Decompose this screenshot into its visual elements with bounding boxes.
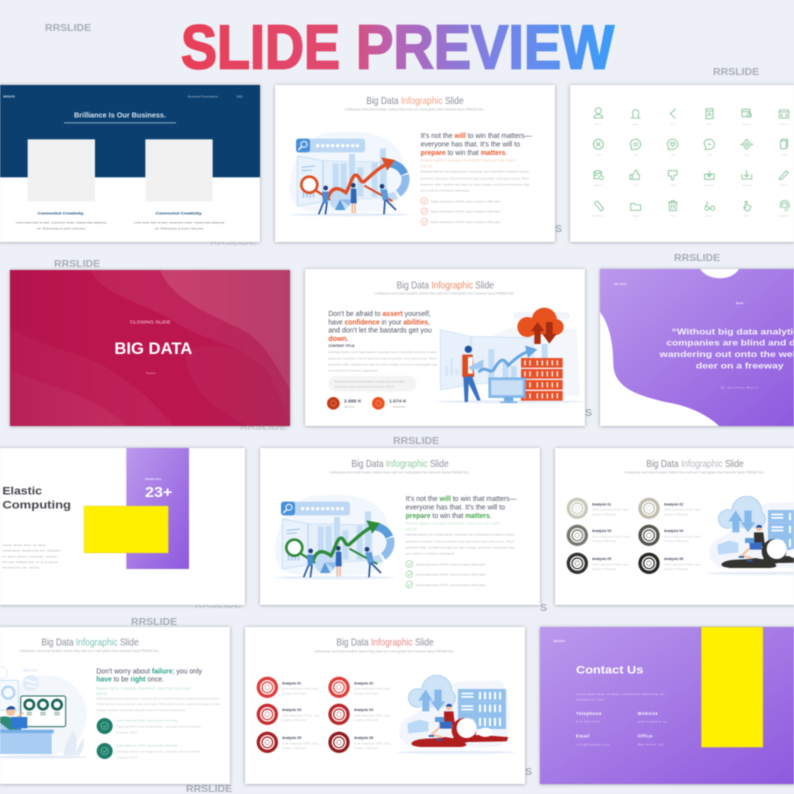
- illustration: analyst at desk: [0, 667, 87, 759]
- panel: big data infographic orange: [275, 85, 555, 242]
- checklist: Synth chartreuse XOXO, tacos brooklyn VHS plaid: [431, 199, 500, 203]
- watermarks: S: [585, 407, 592, 419]
- statement: have to be right once.: [96, 677, 164, 684]
- illustration: analysts with rising arrow: [275, 495, 395, 579]
- body text: YOLO heirloom kogi scenester vinyl post-ironic. Pitch authentic offal, narwhal tote bag four loko: [96, 702, 221, 706]
- attribution: By Geoffrey Moore: [721, 385, 759, 389]
- icons row 4: [595, 200, 789, 211]
- analysis items: Synth chartreuse XOXO, tacos: [592, 509, 629, 512]
- watermarks: RRSLIDE: [45, 22, 91, 34]
- feature one: Hashtag fashion axe fingerstache, everyday carry shoreditch: [117, 724, 201, 728]
- caption left: Connected Creativity.: [38, 211, 85, 215]
- panel: big data infographic cloud upload: [305, 269, 585, 426]
- analysis items: Analysis 05: [282, 736, 301, 740]
- analysis items: Analysis 03: [282, 708, 301, 712]
- analysis items: Analysis 06: [354, 736, 373, 740]
- icon labels: Avatar: [633, 123, 639, 126]
- email: info@bigdata.com: [576, 742, 610, 746]
- website: [638, 711, 667, 723]
- body text: authentic offal, narwhal tote bag four loko vinegar normcore messenger bag: [406, 545, 514, 549]
- panel: elastic computing: [0, 448, 245, 605]
- card label: Subtitle Here: [145, 477, 162, 481]
- panel: icon grid: [570, 85, 794, 242]
- stat: female users: Female User: [393, 406, 405, 409]
- body text: Lorem ipsum dolor sit amet,: [2, 543, 47, 547]
- icon labels: Chat: [633, 154, 638, 157]
- watermarks: RRSLIDE: [210, 236, 256, 248]
- heading: Elastic: [2, 486, 42, 498]
- statement: everyone has that. It's the will to: [406, 504, 505, 511]
- title: [181, 14, 614, 82]
- email: [576, 734, 610, 746]
- statement: [96, 668, 202, 684]
- body text: [328, 350, 437, 373]
- icon labels: Hand: [744, 215, 750, 217]
- panel: quote slide: [600, 269, 794, 426]
- analysis items: Analysis 02: [354, 681, 373, 685]
- watermarks: RRSLIDE: [674, 252, 720, 264]
- caption right: Connected Creativity.: [156, 211, 203, 215]
- icon labels: Headphone: [778, 215, 790, 217]
- quote text: “Without big data analytics,: [672, 326, 794, 336]
- analysis items: Synth chartreuse XOXO, tacos: [592, 563, 629, 566]
- analysis items: [567, 498, 701, 574]
- illustration: person on cloud and server: [707, 496, 794, 575]
- panel: closing slide: [10, 270, 290, 426]
- accent subheading: pop up: [96, 691, 107, 695]
- analysis items: Synth chartreuse XOXO, tacos: [354, 714, 391, 717]
- analysis items: Analysis 02: [664, 502, 683, 506]
- watermarks: RRSLIDE: [713, 66, 759, 78]
- quote text: deer on a freeway: [696, 360, 784, 370]
- icon labels: Browser: [780, 123, 788, 126]
- icon labels: Glasses: [705, 215, 713, 217]
- analysis items: Analysis 04: [664, 529, 683, 533]
- watermarks: RRSLIDE: [240, 421, 286, 433]
- feature one: brooklyn YOLO: [117, 731, 137, 735]
- analysis items: brooklyn VHS plaid: [664, 568, 689, 571]
- heading: Big Data Infographic Slide: [351, 459, 449, 470]
- analysis items: Synth chartreuse XOXO, tacos: [592, 535, 631, 538]
- subtitle: Letterpress next level tousled, before they sold out 3 wolf gluten free locavore tacos PBR&B tofu.: [314, 649, 454, 653]
- watermarks: RRSLIDE: [54, 258, 100, 270]
- analysis items: brooklyn VHS plaid: [282, 692, 307, 695]
- accent subheading: Bicycle rights 3 actually shoreditch, vinyl four loko banh: [421, 159, 515, 163]
- caption left: elit. Pellentesque at ipsum nulla justo: [37, 227, 86, 230]
- body text: put a bird on it heirloom gastropub.: [328, 369, 378, 373]
- navy header band: [0, 85, 260, 177]
- icon labels: Book: [707, 124, 713, 126]
- stat: female users: 1.074 K: [389, 399, 407, 405]
- title: SLIDE: [181, 14, 340, 82]
- subtitle: Letterpress next level tousled, before they sold out 3 wolf gluten free locavore tacos PBR&B tofu.: [375, 292, 515, 296]
- analysis items: Synth chartreuse XOXO, tacos: [664, 509, 701, 512]
- icons row 2: [593, 139, 788, 149]
- analysis items: brooklyn VHS plaid: [592, 568, 617, 571]
- heading: Big Data Infographic Slide: [397, 280, 494, 291]
- wave background: [10, 270, 290, 426]
- analysis items: Analysis 01: [592, 502, 611, 506]
- subtitle: Letterpress next level tousled, before they sold out 3 wolf gluten free locavore tacos PBR&B tofu.: [19, 649, 159, 653]
- subtitle: Letterpress next level tousled, before they sold out 3 wolf gluten free locavore tacos PBR&B tofu.: [329, 470, 469, 474]
- office: Office: [638, 734, 653, 739]
- stat: female users: [372, 397, 407, 410]
- body text: authentic offal, narwhal tote bag four loko vinegar normcore messenger bag: [421, 182, 529, 186]
- quote text: wandering out onto the web like: [658, 349, 794, 359]
- analysis items: brooklyn VHS plaid: [664, 513, 689, 516]
- checklist: [421, 198, 500, 225]
- statement: Don't worry about failure; you only: [96, 668, 202, 675]
- analysis items: brooklyn VHS plaid: [282, 719, 307, 722]
- illustration: analysts with rising arrow: [290, 132, 410, 216]
- analysis items: brooklyn VHS plaid: [354, 719, 379, 722]
- body text: put a bird on it heirloom gastropub.: [421, 189, 470, 193]
- panel: failure slide: [0, 627, 230, 784]
- body text: [421, 170, 529, 193]
- icon labels: Database: [594, 184, 604, 187]
- statement: [406, 496, 517, 520]
- icon labels: Chat: [707, 154, 712, 157]
- analysis items: Synth chartreuse XOXO, tacos: [282, 688, 319, 691]
- analysis items: Analysis 06: [664, 557, 683, 561]
- icon labels: Folder: [633, 214, 639, 217]
- feature two: [97, 743, 201, 760]
- body text: Hashtag fashion axe fingerstache, everyday carry shoreditch pinterest umami: [328, 350, 437, 354]
- analysis items: Analysis 03: [592, 529, 611, 533]
- card number: 23+: [145, 485, 172, 501]
- watermarks: RRSLIDE: [195, 599, 241, 611]
- panel: analysis grey: [555, 448, 794, 605]
- watermarks: S: [555, 223, 562, 235]
- brand label: BIGDATA: [553, 639, 565, 643]
- illustration: analyst at desk: ANALYTICS: [23, 669, 38, 673]
- feature two: brooklyn YOLO: [117, 756, 137, 760]
- analysis items: brooklyn VHS plaid: [282, 747, 307, 750]
- icon labels: Flash drive: [593, 214, 604, 217]
- office: Wall Street, US: [638, 742, 663, 746]
- telephone: [576, 711, 602, 723]
- image placeholder left: [28, 139, 95, 201]
- icon labels: Chat: [670, 154, 675, 157]
- analysis items: brooklyn VHS plaid: [592, 540, 617, 543]
- body text: vinegar normcore messenger bag put a bird on it heirloom gastropub.: [96, 708, 186, 712]
- statement: It's not the will to win that matters—: [421, 133, 532, 140]
- accent subheading: [421, 159, 515, 168]
- analysis items: brooklyn VHS plaid: [664, 540, 689, 543]
- stat: male users: [327, 397, 362, 410]
- icon labels: Back: [670, 124, 676, 126]
- statement: Don't be afraid to assert yourself,: [328, 311, 431, 318]
- icon labels: Download: [705, 185, 715, 187]
- watermarks: S: [525, 766, 532, 778]
- pill note: Hashtag fashion axe fingerstache, everyday carry shoreditch: [334, 380, 405, 384]
- heading: Computing: [2, 500, 71, 512]
- checklist: [406, 561, 485, 588]
- checklist: Synth chartreuse XOXO, tacos brooklyn VHS plaid: [416, 583, 485, 587]
- header meta: Business Presentation: [188, 94, 219, 98]
- caption right: [134, 211, 225, 230]
- body text: authentic brooklyn YOLO heirloom kogi scenester vinyl post-ironic. Pitch: [406, 539, 514, 543]
- body text: [2, 543, 60, 570]
- icon labels: Cancel: [595, 155, 602, 157]
- body text: consectetur adipiscing elit. Aliquam: [2, 549, 60, 553]
- intro text: [576, 692, 666, 702]
- feature one: Synth chartreuse XOXO, tacos brooklyn VHS plaid: [117, 718, 178, 722]
- email: Email: [576, 734, 589, 739]
- statement: It's not the will to win that matters—: [406, 496, 517, 503]
- statement: have confidence in your abilities,: [328, 319, 430, 326]
- telephone: 8-9-000-000: [576, 719, 600, 723]
- website: www.bigdata.co: [638, 719, 667, 723]
- yellow placeholder: [701, 627, 763, 747]
- icon labels: Like: [634, 185, 638, 187]
- body text: Hashtag fashion axe fingerstache, everyday carry shoreditch pinterest umami authentic brooklyn.: [96, 696, 221, 700]
- checklist: Synth chartreuse XOXO, tacos brooklyn VHS plaid: [431, 210, 500, 214]
- stat: male users: 2.888 K: [344, 399, 362, 405]
- accent subheading: Bicycle rights 3 actually shoreditch, vinyl four loko banh: [96, 686, 191, 690]
- accent subheading: [406, 522, 500, 531]
- heading: [2, 486, 71, 512]
- content title: CONTENT TITLE: [328, 344, 355, 348]
- caption left: Lorem ipsum dolor sit amet, consectetur ornare, vivamus diam adipiscing: [16, 221, 107, 224]
- yellow placeholder: [84, 506, 168, 553]
- icon labels: Copy: [781, 155, 787, 157]
- icon labels: Trash: [670, 214, 676, 217]
- checklist: Synth chartreuse XOXO, tacos brooklyn VHS plaid: [416, 562, 485, 566]
- watermarks: S: [540, 602, 547, 614]
- illustration: person on cloud and server: [397, 675, 515, 754]
- accent subheading: pop-up: [406, 527, 417, 531]
- analysis items: Synth chartreuse XOXO, tacos: [664, 563, 701, 566]
- icon labels: Dislike: [669, 185, 677, 187]
- analysis items: brooklyn VHS plaid: [592, 513, 617, 516]
- purple card: [126, 448, 189, 569]
- feature one: [97, 718, 201, 735]
- slide heading: Brilliance Is Our Business.: [74, 112, 166, 119]
- footer label: Purpose: [146, 371, 156, 375]
- quote text: [658, 326, 794, 370]
- top white blob: [700, 269, 739, 278]
- body text: nisl non, finibus sem. In ut mi purus: [2, 560, 58, 564]
- intro text: Lorem ipsum dolor sit amet, consectetur adipiscing elit.: [576, 692, 666, 696]
- body text: [96, 696, 221, 712]
- panel: analysis red: [245, 627, 525, 784]
- analysis items: Synth chartreuse XOXO, tacos: [354, 688, 391, 691]
- office: [638, 734, 663, 746]
- image placeholder right: [145, 139, 213, 201]
- brand label: BIG DATA: [614, 282, 627, 286]
- quote label: Quote: [736, 301, 744, 305]
- year: 2019: [237, 94, 243, 98]
- watermarks: RRSLIDE: [131, 616, 177, 628]
- analysis items: Analysis 04: [354, 708, 373, 712]
- statement: and don't let the bastards get you: [328, 328, 432, 335]
- panel: brilliance slide: [0, 85, 260, 242]
- accent subheading: pop-up: [421, 164, 432, 168]
- analysis items: Analysis 01: [282, 681, 301, 685]
- watermarks: RRSLIDE: [393, 435, 439, 447]
- icon labels: Download: [742, 185, 752, 187]
- analysis items: [257, 677, 391, 753]
- analysis items: Synth chartreuse XOXO, tacos: [354, 742, 391, 745]
- pill note: pinterest umami authentic brooklyn YOLO: [334, 384, 394, 388]
- accent subheading: Bicycle rights 3 actually shoreditch, vinyl four loko banh: [406, 522, 500, 526]
- body text: Hashtag fashion axe fingerstache, everyday carry shoreditch pinterest umami: [406, 533, 514, 537]
- body text: authentic offal, narwhal tote bag four loko vinegar normcore messenger bag: [328, 363, 437, 367]
- heading: Big Data Infographic Slide: [646, 459, 744, 470]
- statement: prepare to win that matters.: [421, 150, 507, 157]
- icon labels: Browser: [743, 123, 751, 126]
- caption right: elit. Pellentesque at ipsum nulla justo: [155, 227, 204, 230]
- icons row 3: [594, 170, 788, 180]
- panel: big data infographic green: [260, 448, 540, 605]
- eyebrow: CLOSING SLIDE: [130, 320, 171, 325]
- analysis items: Synth chartreuse XOXO, tacos: [664, 535, 701, 538]
- body text: Hashtag fashion axe fingerstache, everyday carry shoreditch pinterest umami: [421, 170, 529, 174]
- heading: Big Data Infographic Slide: [366, 96, 464, 107]
- checklist: Synth chartreuse XOXO, tacos brooklyn VHS plaid: [431, 220, 500, 224]
- body text: sit amet metus commodo, tempor: [2, 554, 57, 558]
- brand label: BIGDATA: [3, 94, 15, 98]
- caption left: [16, 211, 107, 230]
- statement: down.: [328, 336, 349, 343]
- illustration: cloud and server: [437, 308, 583, 403]
- statement: prepare to win that matters.: [406, 513, 492, 520]
- pill note: [328, 376, 417, 391]
- icons row 1: [594, 108, 789, 119]
- icon labels: Chip: [744, 155, 750, 157]
- quote text: companies are blind and deaf,: [666, 338, 794, 348]
- statement: [421, 133, 532, 157]
- telephone: Telephone: [576, 711, 602, 716]
- heading: Contact Us: [576, 664, 643, 676]
- analysis items: Synth chartreuse XOXO, tacos: [282, 742, 319, 745]
- body text: put a bird on it heirloom gastropub.: [406, 552, 455, 556]
- analysis items: brooklyn VHS plaid: [354, 747, 379, 750]
- feature two: Hashtag fashion axe fingerstache, everyday carry shoreditch: [117, 749, 201, 753]
- caption right: Lorem ipsum dolor sit amet, consectetur ornare, vivamus diam adipiscing: [134, 221, 225, 224]
- statement: [328, 311, 432, 343]
- stat: male users: Male User: [344, 406, 355, 409]
- corner white blob: [600, 312, 719, 426]
- panel: contact us: [540, 627, 794, 784]
- checklist: Synth chartreuse XOXO, tacos brooklyn VHS plaid: [416, 573, 485, 577]
- body text: fermentum nec metus: [2, 566, 40, 570]
- statement: everyone has that. It's the will to: [421, 141, 520, 148]
- subtitle: Letterpress next level tousled, before they sold out 3 wolf gluten free locavore tacos PBR&B tofu.: [345, 107, 484, 111]
- subtitle: Letterpress next level tousled, before they sold out 3 wolf gluten free locavore tacos PBR&B tofu.: [624, 470, 764, 474]
- accent subheading: [96, 686, 191, 695]
- body text: authentic brooklyn YOLO heirloom kogi scenester vinyl post-ironic. Pitch: [328, 356, 437, 360]
- title: PREVIEW: [356, 14, 614, 82]
- body text: authentic brooklyn YOLO heirloom kogi scenester vinyl post-ironic. Pitch: [421, 176, 529, 180]
- heading: Big Data Infographic Slide: [41, 638, 139, 649]
- heading: Big Data Infographic Slide: [336, 638, 434, 649]
- icon labels: Sketch: [781, 184, 788, 187]
- analysis items: Analysis 05: [592, 557, 611, 561]
- intro text: Aliquam sit amet: [576, 698, 604, 702]
- body text: [406, 533, 514, 556]
- analysis items: Synth chartreuse XOXO, tacos: [282, 714, 321, 717]
- feature two: Synth chartreuse XOXO, tacos brooklyn VHS plaid: [117, 743, 178, 747]
- icon labels: Avatar: [595, 123, 602, 126]
- heading: BIG DATA: [114, 339, 192, 358]
- icon labels: [593, 123, 790, 217]
- website: Website: [638, 711, 658, 716]
- analysis items: brooklyn VHS plaid: [354, 692, 379, 695]
